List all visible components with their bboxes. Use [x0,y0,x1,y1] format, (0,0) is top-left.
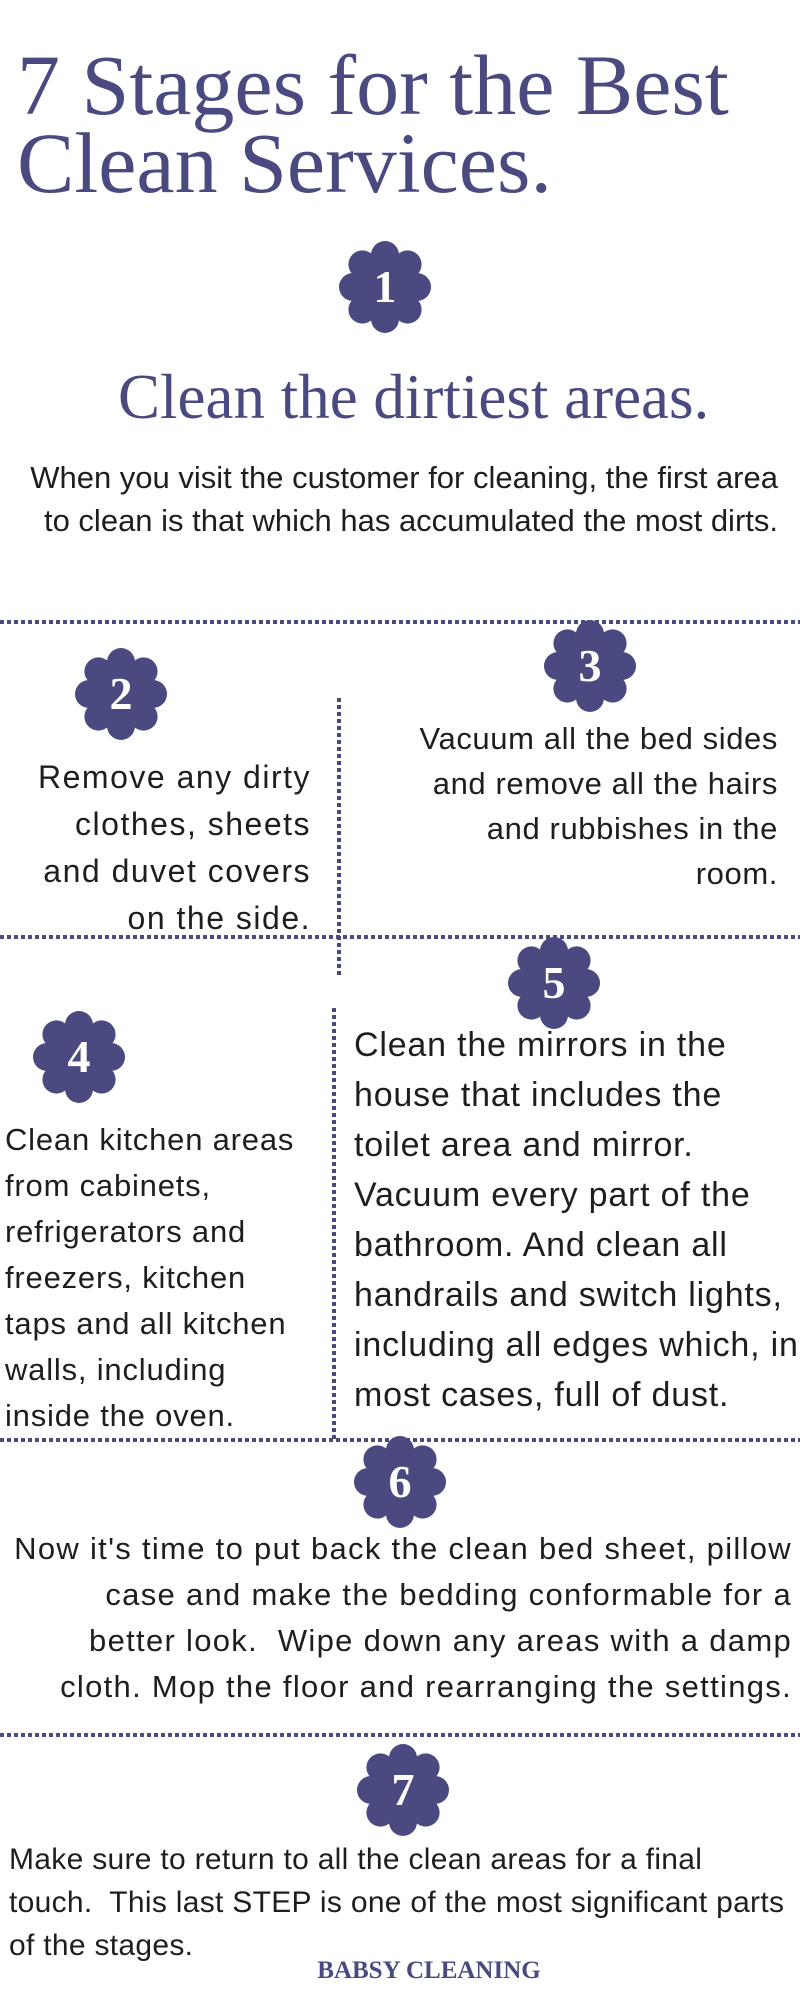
text: step 2: on the side. [128,900,311,936]
text: step 5: toilet area and mirror. [354,1126,694,1164]
footer brand: BABSY CLEANING [317,1957,541,1984]
text: step 4: inside the oven. [5,1398,235,1433]
icon: flower 4: 4 [68,1031,90,1082]
text: step 6 [14,1531,792,1704]
icon: flower 3: 3 [578,640,602,691]
text: step 7 [9,1843,784,1962]
text: step 5: Clean the mirrors in the [354,1026,727,1064]
icon: flower 4 [33,1011,125,1103]
text: step 2: clothes, sheets [75,806,311,842]
text: step 4: from cabinets, [5,1168,211,1203]
icon: flower 2: 2 [110,668,132,719]
text: step 6: Now it's time to put back the clean bed sheet, pillow [14,1531,792,1566]
icon: flower 1 [339,241,431,333]
text: step 5: bathroom. And clean all [354,1226,728,1264]
icon: flower 6: 6 [388,1456,412,1507]
text: step 5: house that includes the [354,1076,722,1114]
text: step 7: Make sure to return to all the clean areas for a final [9,1843,702,1876]
title: 7 Stages for the Best [17,37,729,133]
icon: flower 5: 5 [542,957,566,1008]
text: step 1: When you visit the customer for cleaning, the first area [30,460,778,495]
text: step 5: handrails and switch lights, [354,1276,783,1314]
text: step 3: room. [696,856,778,891]
text: step 3 [420,721,778,891]
icon: flower 6 [354,1436,446,1528]
text: step 1 [30,460,778,538]
icon: flower 2 [75,648,167,740]
text: step 2 [38,759,311,936]
text: step 6: cloth. Mop the floor and rearranging the settings. [60,1669,792,1704]
text: step 1: to clean is that which has accumulated the most dirts. [44,503,778,538]
text: step 4: taps and all kitchen [5,1306,286,1341]
text: step 4: Clean kitchen areas [5,1122,294,1157]
text: step 4: refrigerators and [5,1214,246,1249]
text: step 3: Vacuum all the bed sides [420,721,778,756]
text: step 5: including all edges which, in [354,1326,799,1364]
text: step 2: Remove any dirty [38,759,311,795]
text: step 4: walls, including [5,1352,226,1387]
text: step 6: better look. Wipe down any areas with a damp [89,1623,792,1658]
text: step 4: freezers, kitchen [5,1260,246,1295]
text: step 5 [354,1026,799,1414]
icon: flower 7 [357,1744,449,1836]
text: step 7: of the stages. [9,1929,193,1962]
text: step 5: most cases, full of dust. [354,1376,729,1414]
icon: flower 5 [508,937,600,1029]
icon: flower 7: 7 [392,1764,414,1815]
text: step 6: case and make the bedding conformable for a [105,1577,792,1612]
icon: flower 1: 1 [374,261,396,312]
text: step 7: touch. This last STEP is one of the most significant parts [9,1886,784,1919]
title [17,37,729,211]
text: step 4 [5,1122,294,1433]
text: step 2: and duvet covers [43,853,311,889]
text: step 5: Vacuum every part of the [354,1176,751,1214]
heading: step 1: Clean the dirtiest areas. [118,362,709,432]
title: Clean Services. [17,115,552,211]
text: step 3: and rubbishes in the [487,811,778,846]
icon: flower 3 [544,620,636,712]
text: step 3: and remove all the hairs [433,766,778,801]
